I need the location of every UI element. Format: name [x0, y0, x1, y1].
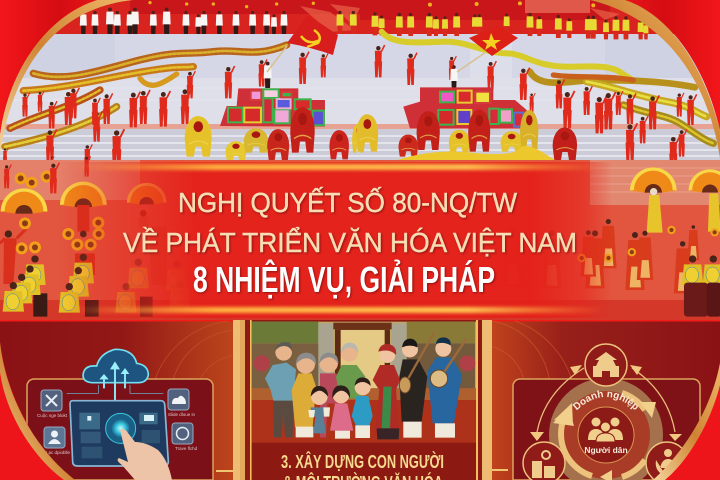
app labels: Slide dloue in	[168, 412, 196, 417]
left dragons	[5, 45, 287, 147]
flag: Communist Party	[267, 15, 338, 72]
man, blue tunic with moon lute	[427, 337, 467, 438]
app icon: bottom left	[44, 427, 65, 448]
illustration background	[252, 320, 477, 480]
top stand with flags	[0, 0, 720, 36]
grandfather, blue sweater	[265, 342, 296, 437]
woman, red ao dai with hat	[373, 344, 400, 439]
app icon: top right	[168, 389, 189, 410]
outer ring	[549, 378, 663, 480]
inner circle	[578, 407, 634, 463]
yellow-clad performers, top row	[371, 12, 648, 39]
grandmother, yellow ao dai	[292, 353, 316, 437]
girl, pink dress	[330, 385, 353, 439]
title line 2: VỀ PHÁT TRIỂN VĂN HÓA VIỆT NAM	[123, 227, 577, 258]
right folk dancers	[503, 167, 720, 317]
tablet with touch circle	[70, 401, 168, 466]
double-headed arrows	[537, 368, 675, 432]
lower floor with folk performers	[0, 156, 720, 320]
left stack of coloured boxes	[220, 88, 325, 127]
corner curtain: top left	[0, 0, 133, 153]
girl, blue overalls	[308, 386, 330, 433]
arrow heads	[530, 365, 682, 441]
flag: Vietnam	[457, 26, 518, 72]
node: citadel	[585, 344, 627, 386]
panel: digital transformation	[0, 320, 252, 480]
app labels: Cuộc nge blokt	[37, 413, 68, 418]
people icon	[588, 418, 623, 442]
stage walls and steps	[0, 34, 720, 162]
bronze drum pattern	[480, 321, 572, 390]
grandmother, pink blouse	[319, 353, 339, 437]
right dragons	[382, 32, 713, 143]
man, black tunic with lute	[399, 333, 434, 438]
corner curtain: bottom left	[0, 342, 75, 480]
node: business buildings	[523, 442, 565, 480]
background photo: dragon dance stage	[0, 0, 720, 320]
cloud with upload arrows	[67, 349, 163, 400]
red performers, right half	[375, 45, 697, 170]
right lions	[356, 109, 577, 163]
gold frame bars	[476, 320, 508, 480]
app icon: top left	[41, 390, 62, 411]
label on arc: Doanh nghiệp: Doanh nghiệp	[572, 390, 638, 410]
circular arrows	[561, 393, 645, 477]
panel 3 caption: 3. XÂY DỰNG CON NGƯỜI	[281, 451, 444, 472]
app icon: bottom right	[172, 423, 193, 444]
bronze drum pattern	[150, 321, 240, 400]
panel 3 caption	[281, 451, 444, 480]
app labels: Lạc dpioblle	[46, 450, 71, 455]
left lions	[185, 107, 364, 161]
node: citizen in hands	[646, 442, 688, 480]
boy, blue tunic	[352, 377, 373, 438]
red performers, left half	[3, 52, 328, 170]
right stack of coloured boxes	[403, 87, 527, 128]
left seated musicians in yellow	[3, 254, 191, 317]
corner curtain: bottom right	[653, 363, 720, 480]
corner curtain: top right	[590, 0, 720, 158]
arrow heads on ring	[553, 402, 656, 480]
app labels	[37, 412, 198, 455]
panel: stakeholders cycle	[476, 320, 720, 480]
white-clad performers, top row	[80, 8, 357, 34]
stakeholder card	[513, 379, 700, 480]
hand pointing	[118, 429, 172, 480]
left fans and flowers	[0, 156, 167, 285]
red title banner	[0, 162, 720, 318]
app labels: Trave flchd	[175, 446, 198, 451]
gold frame bars	[216, 320, 252, 480]
label: Người dân: Người dân	[584, 445, 628, 455]
title line 3: 8 NHIỆM VỤ, GIẢI PHÁP	[193, 258, 495, 300]
grandfather, green shirt	[336, 343, 365, 399]
digital card	[27, 379, 213, 480]
title line 1: NGHỊ QUYẾT SỐ 80-NQ/TW	[178, 186, 518, 218]
panel: people and culture illustration	[252, 320, 477, 480]
